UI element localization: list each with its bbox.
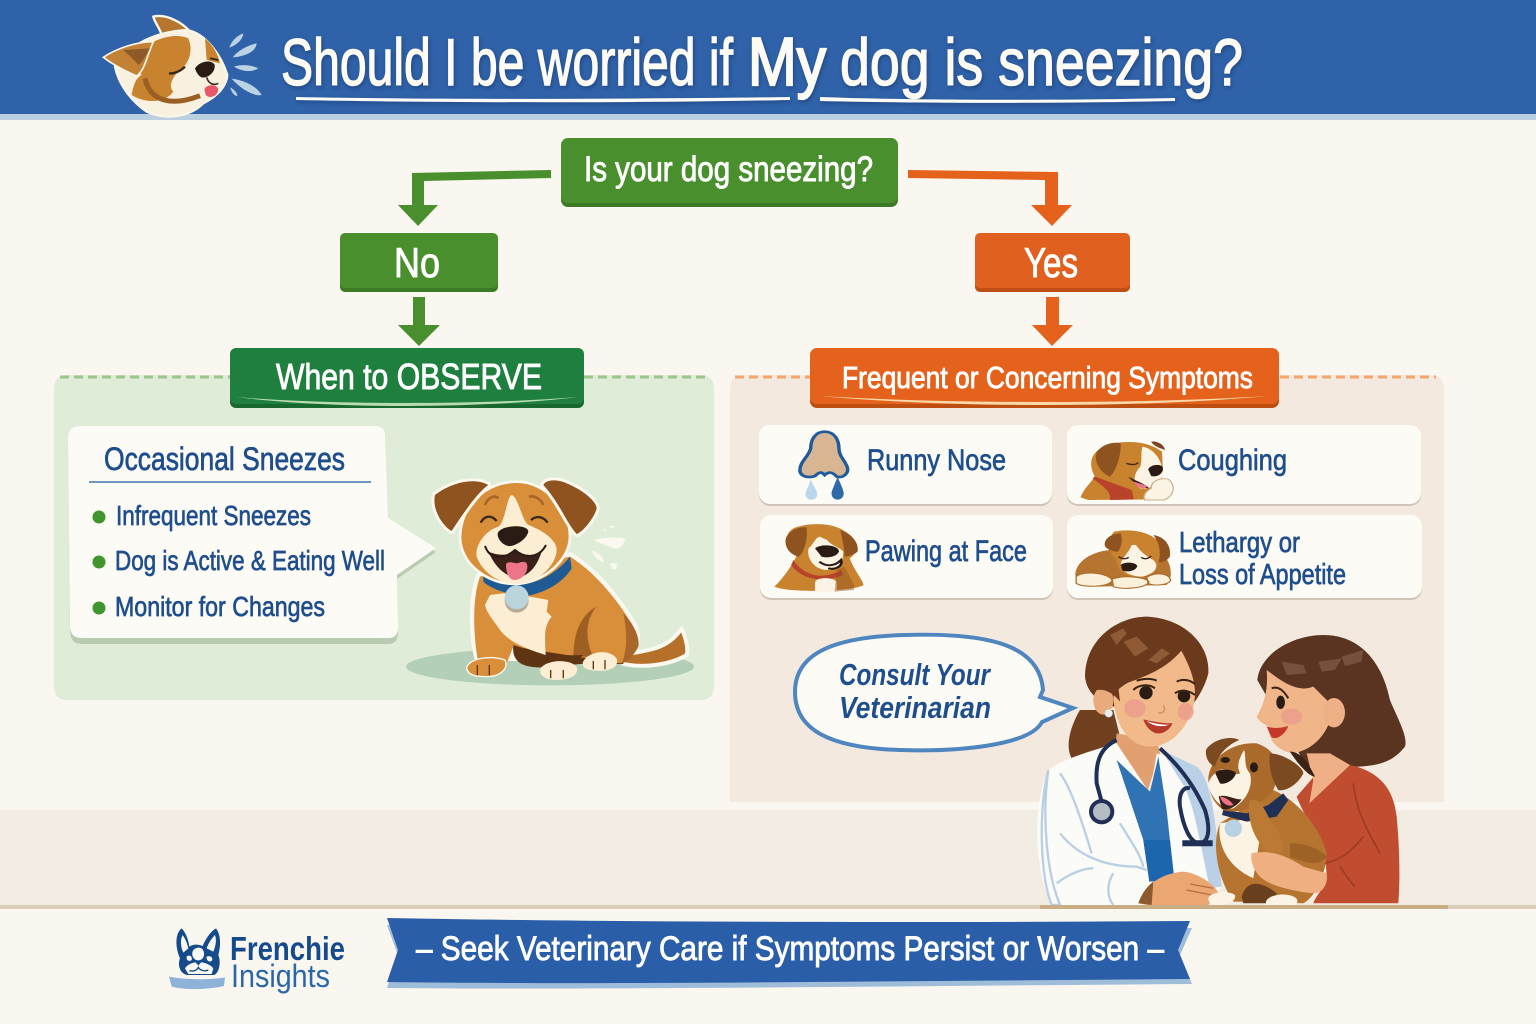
icon: tired lying dog — [1075, 530, 1171, 588]
observe heading — [230, 348, 584, 408]
yes box: Yes — [1024, 239, 1078, 286]
speech bubble: consult your veterinarian: Consult Your — [839, 657, 992, 692]
no box: No — [394, 239, 440, 286]
title: My — [748, 24, 826, 100]
speech bubble: consult your veterinarian: Veterinarian — [839, 690, 991, 725]
table edge — [1040, 905, 1448, 909]
icon: happy sitting dog — [406, 480, 694, 685]
arrow: question to yes — [908, 170, 1072, 226]
symptom card: lethargy or loss of appetite — [1067, 515, 1422, 600]
arrow: question to no — [398, 170, 551, 226]
no box — [340, 233, 498, 292]
question box: is your dog sneezing — [561, 138, 898, 207]
panel: frequent or concerning symptoms — [730, 348, 1444, 802]
callout: occasional sneezes: Monitor for Changes — [115, 591, 325, 622]
callout: occasional sneezes — [68, 426, 436, 644]
icon: sneezing dog head — [103, 16, 262, 116]
symptom card: pawing at face: Pawing at Face — [865, 535, 1027, 568]
symptom card: coughing: Coughing — [1178, 444, 1287, 477]
puppy held by owner — [1206, 738, 1327, 909]
symptom card: lethargy or loss of appetite: Lethargy or — [1179, 527, 1300, 559]
speech bubble: consult your veterinarian — [795, 635, 1073, 750]
symptoms heading: Frequent or Concerning Symptoms — [842, 360, 1253, 395]
symptom card: runny nose: Runny Nose — [867, 444, 1006, 477]
illustration: veterinarian with owner and dog — [1037, 617, 1406, 909]
callout: occasional sneezes: Occasional Sneezes — [104, 441, 345, 477]
question box: is your dog sneezing: Is your dog sneezing? — [584, 150, 873, 189]
symptom card: lethargy or loss of appetite: Loss of Appetite — [1179, 559, 1346, 591]
callout: occasional sneezes: Infrequent Sneezes — [116, 500, 311, 531]
symptoms heading — [810, 348, 1279, 408]
logo: frenchie insights: Insights — [231, 958, 330, 994]
icon: frenchie head logo — [169, 928, 225, 989]
symptom card: coughing — [1067, 425, 1421, 506]
observe heading: When to OBSERVE — [276, 356, 542, 397]
yes box — [975, 233, 1130, 292]
veterinarian — [1037, 617, 1222, 905]
arrow: yes to symptoms — [1032, 297, 1073, 346]
logo: frenchie insights: Frenchie — [230, 930, 345, 967]
symptom card: pawing at face — [760, 515, 1053, 600]
icon: nose with drips — [800, 432, 848, 500]
symptom card: runny nose — [759, 425, 1052, 506]
icon: dog pawing at face — [774, 524, 864, 592]
title — [281, 24, 1243, 103]
title: Should I be worried if — [281, 25, 733, 99]
logo: frenchie insights — [169, 928, 345, 994]
panel: when to observe — [54, 348, 714, 700]
title: dog is sneezing? — [840, 25, 1243, 99]
owner — [1257, 635, 1406, 903]
arrow: no to observe — [398, 297, 440, 346]
banner: seek veterinary care: – Seek Veterinary Care if Symptoms Persist or Worsen – — [416, 930, 1164, 968]
icon: coughing dog — [1080, 442, 1173, 500]
header banner — [0, 0, 1536, 120]
banner: seek veterinary care — [387, 918, 1192, 989]
callout: occasional sneezes: Dog is Active & Eating Well — [115, 545, 385, 576]
